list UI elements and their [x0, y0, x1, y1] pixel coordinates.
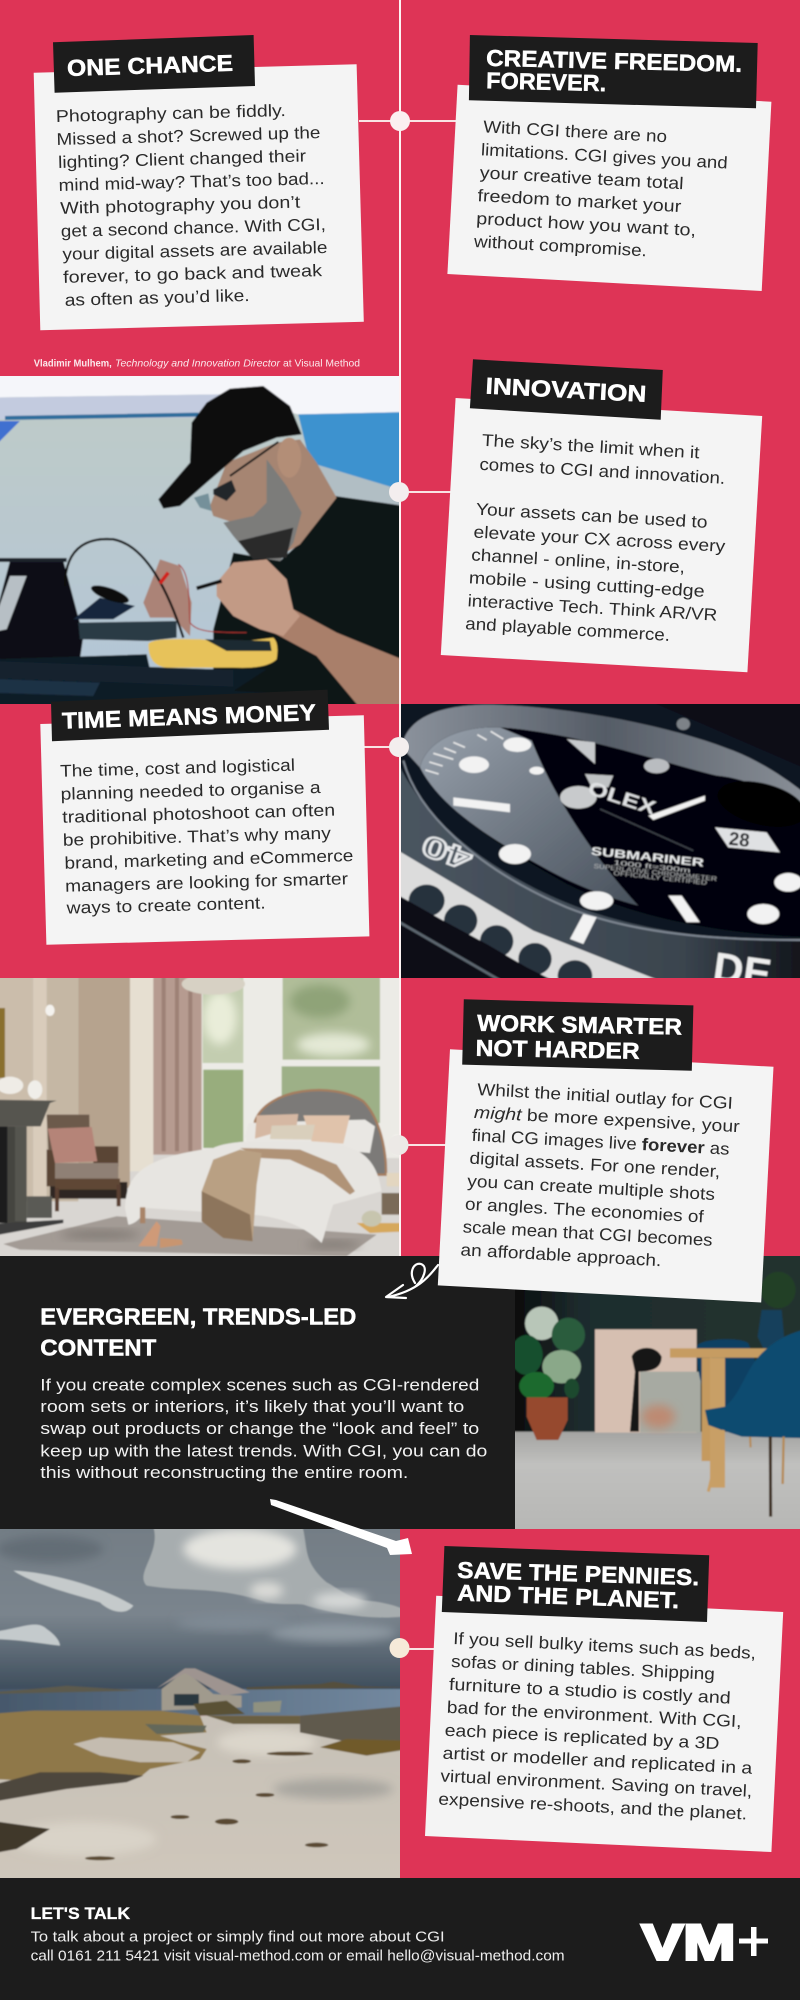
arrow: bold white arrow to beach section	[270, 1499, 412, 1555]
front chair	[705, 1328, 800, 1438]
text: work smarter body: final CG images live forever as	[471, 1126, 730, 1159]
text: save the pennies body: artist or modeller and replicated in a	[442, 1744, 753, 1778]
text: evergreen body: this without reconstructing the entire room.	[40, 1464, 408, 1482]
text: one chance body: get a second chance. With CGI,	[61, 215, 326, 241]
caption: quote attribution: Technology and Innovation Director	[115, 358, 280, 370]
photo: luxury dive watch dial close-up: 1000 ft=300m	[613, 860, 692, 875]
text: innovation body: The sky’s the limit when it	[481, 431, 700, 462]
text: innovation body: mobile - using cutting-edge	[468, 568, 705, 601]
dial	[472, 728, 800, 937]
text: creative freedom body: freedom to market your	[477, 186, 682, 216]
text: one chance body: Missed a shot? Screwed up the	[56, 123, 321, 149]
text: work smarter body: or angles. The economies of	[465, 1195, 705, 1226]
photo: luxury dive watch dial close-up: SUBMARINER	[590, 846, 704, 869]
text: one chance body: your digital assets are available	[62, 238, 328, 264]
heading: work smarter not harder	[462, 999, 693, 1071]
text: innovation body: channel - online, in-store,	[471, 545, 685, 577]
panel: innovation	[441, 359, 762, 672]
text: footer call to action	[31, 1904, 565, 1964]
text: evergreen body: If you create complex scenes such as CGI-rendered	[40, 1376, 479, 1394]
text: one chance body: lighting? Client changed their	[58, 146, 307, 172]
text: innovation body	[465, 430, 732, 648]
heading: one chance: ONE CHANCE	[67, 50, 233, 81]
text: innovation body: and playable commerce.	[465, 614, 671, 645]
window	[202, 978, 399, 1158]
caption: quote attribution: at Visual Method	[283, 358, 360, 370]
text: one chance body: mind mid-way? That’s too bad...	[58, 169, 325, 195]
clouds	[142, 1529, 400, 1618]
panel: creative freedom	[447, 35, 771, 291]
back chair	[697, 1339, 760, 1407]
text: save the pennies body: bad for the environment. With CGI,	[446, 1698, 742, 1731]
text: footer call to action: To talk about a project or simply find out more about CGI	[31, 1928, 445, 1945]
arrow: curly hand-drawn arrow	[386, 1264, 438, 1298]
central timeline line	[399, 0, 401, 1256]
connector: work smarter	[388, 1135, 447, 1155]
text: save the pennies body: expensive re-shoots, and the planet.	[438, 1789, 748, 1824]
text: time means money body: managers are looking for smarter	[65, 869, 349, 896]
text: evergreen body: keep up with the latest trends. With CGI, you can do	[40, 1442, 487, 1460]
throw	[240, 1148, 355, 1195]
photo: luxury dive watch dial close-up: DE.	[710, 943, 786, 999]
body	[213, 496, 410, 716]
photo: technician with cap soldering electronics	[0, 366, 410, 716]
text: one chance body: With photography you don’t	[60, 193, 301, 218]
baseboard and floor edge	[50, 1182, 127, 1199]
text: creative freedom body: product how you want to,	[476, 209, 697, 240]
text: time means money body	[60, 754, 355, 918]
text: creative freedom body: your creative team total	[479, 163, 684, 193]
shoes	[138, 1221, 161, 1246]
dial lettering: OLEX	[585, 778, 658, 820]
panel: time means money	[40, 690, 369, 945]
photo: luxury dive watch dial close-up: 28	[728, 828, 751, 851]
text: innovation body: Your assets can be used to	[475, 500, 708, 532]
footer band	[0, 1878, 800, 2000]
photo: beach hut under cloudy sky	[0, 1519, 410, 1889]
wires and probes	[65, 539, 183, 638]
hut	[162, 1671, 242, 1711]
bezel teeth	[401, 851, 656, 978]
photo: luxury dive watch dial close-up: OFFICIALLY CERTIFIED	[613, 870, 708, 887]
ticks	[425, 731, 503, 774]
text: evergreen body: swap out products or change the “look and feel” to	[40, 1420, 479, 1438]
panel: work smarter not harder	[438, 999, 774, 1302]
fireplace	[6, 1125, 28, 1224]
heading: creative freedom forever	[469, 35, 758, 108]
text: time means money body: be prohibitive. That’s why many	[63, 824, 332, 850]
text: time means money body: traditional photoshoot can often	[62, 801, 335, 827]
grass and rocks	[0, 1711, 207, 1782]
text: one chance body: as often as you’d like.	[64, 286, 250, 310]
seaweed patches	[85, 1752, 328, 1860]
heading: creative freedom forever: CREATIVE FREEDOM.	[486, 45, 742, 77]
text: evergreen body	[40, 1376, 487, 1482]
duvet	[125, 1140, 382, 1243]
text: save the pennies body: each piece is replicated by a 3D	[444, 1721, 720, 1753]
armchair	[47, 1115, 90, 1150]
heading: time means money	[51, 690, 329, 741]
panel: one chance	[34, 35, 364, 330]
text: innovation body: comes to CGI and innovation.	[479, 455, 726, 488]
text: save the pennies body: If you sell bulky items such as beds,	[453, 1629, 756, 1663]
heading: one chance	[53, 35, 255, 93]
text: save the pennies body: sofas or dining tables. Shipping	[451, 1652, 715, 1684]
panel: save the pennies	[425, 1546, 783, 1852]
heading: work smarter not harder: WORK SMARTER	[477, 1010, 683, 1040]
cap	[158, 386, 302, 509]
heading: work smarter not harder: NOT HARDER	[475, 1035, 640, 1064]
text: innovation body: elevate your CX across every	[473, 522, 726, 556]
connector: time means money	[364, 737, 409, 757]
logo: VM+: VM	[642, 1914, 736, 1970]
connector: one chance to creative freedom	[359, 111, 459, 131]
photo: bedroom interior	[0, 968, 410, 1268]
panel: evergreen content dark band	[0, 1256, 515, 1529]
face and neck	[210, 439, 337, 556]
photo: dark dining room with plant and painting	[515, 1256, 800, 1529]
text: innovation body: interactive Tech. Think AR/VR	[467, 591, 718, 625]
heading: evergreen trends-led content: CONTENT	[40, 1335, 156, 1361]
text: time means money body: ways to create content.	[65, 893, 266, 918]
text: evergreen body: room sets or interiors, it’s likely that you’ll want to	[40, 1398, 464, 1416]
vase	[761, 1272, 796, 1308]
connector: innovation	[389, 482, 453, 502]
text: work smarter body: an affordable approach.	[460, 1240, 662, 1270]
paintings	[595, 1329, 697, 1433]
text: work smarter body: Whilst the initial outlay for CGI	[477, 1080, 733, 1113]
text: work smarter body: might be more expensive, your	[474, 1103, 741, 1136]
connector: save the pennies	[390, 1638, 435, 1658]
heading: evergreen trends-led content: EVERGREEN, TRENDS-LED	[40, 1304, 356, 1330]
table	[670, 1348, 777, 1358]
sand	[0, 1716, 410, 1889]
text: work smarter body	[460, 1080, 742, 1274]
decor	[0, 1008, 5, 1078]
heading: save the pennies and the planet: SAVE THE PENNIES.	[457, 1557, 700, 1590]
plant	[525, 1307, 558, 1340]
text: save the pennies body: virtual environment. Saving on travel,	[440, 1767, 753, 1801]
text: one chance body: Photography can be fiddly.	[56, 101, 286, 126]
text: work smarter body: you can create multiple shots	[467, 1172, 715, 1204]
hour markers	[453, 737, 800, 944]
text: one chance body	[56, 100, 329, 310]
photo: luxury dive watch dial close-up: 40	[418, 828, 476, 876]
rug	[3, 1216, 377, 1256]
multimeter	[148, 638, 277, 668]
text: work smarter body: scale mean that CGI becomes	[462, 1217, 713, 1250]
text: save the pennies body: furniture to a studio is costly and	[449, 1675, 731, 1708]
heading: save the pennies and the planet: AND THE PLANET.	[457, 1580, 680, 1613]
hands and arm	[275, 608, 399, 704]
text: creative freedom body: With CGI there are no	[483, 117, 668, 146]
text: time means money body: planning needed to organise a	[60, 778, 321, 804]
text: save the pennies body	[438, 1629, 759, 1824]
water and islands	[0, 1689, 410, 1716]
tray and teapot	[357, 1223, 410, 1233]
caption: quote attribution: Vladimir Mulhem,	[34, 358, 112, 370]
text: footer call to action: LET'S TALK	[31, 1904, 131, 1923]
heading: time means money: TIME MEANS MONEY	[62, 699, 316, 734]
bezel	[401, 766, 800, 978]
text: creative freedom body: without compromise.	[472, 232, 647, 260]
text: footer call to action: call 0161 211 5421 visit visual-method.com or email hello@visual-method.com	[31, 1947, 565, 1964]
machine	[0, 561, 83, 659]
text: one chance body: forever, to go back and tweak	[63, 261, 323, 287]
text: time means money body: The time, cost and logistical	[60, 756, 295, 781]
heading: evergreen trends-led content	[40, 1304, 356, 1361]
headboard	[255, 1090, 386, 1175]
photo: luxury dive watch dial close-up: SUPERLATIVE CHRONOMETER	[593, 863, 718, 883]
text: creative freedom body: limitations. CGI gives you and	[481, 140, 728, 173]
text: time means money body: brand, marketing and eCommerce	[64, 846, 354, 873]
heading: innovation: INNOVATION	[485, 373, 647, 407]
heading: innovation	[470, 359, 663, 420]
rim	[403, 704, 800, 804]
text: work smarter body: digital assets. For one render,	[469, 1149, 721, 1181]
curtain	[153, 968, 202, 1155]
logo: VM+	[642, 1914, 768, 1970]
heading: save the pennies and the planet	[442, 1546, 709, 1622]
photo: luxury dive watch dial close-up	[401, 704, 800, 978]
heading: creative freedom forever: FOREVER.	[486, 67, 606, 96]
text: creative freedom body	[472, 117, 729, 264]
